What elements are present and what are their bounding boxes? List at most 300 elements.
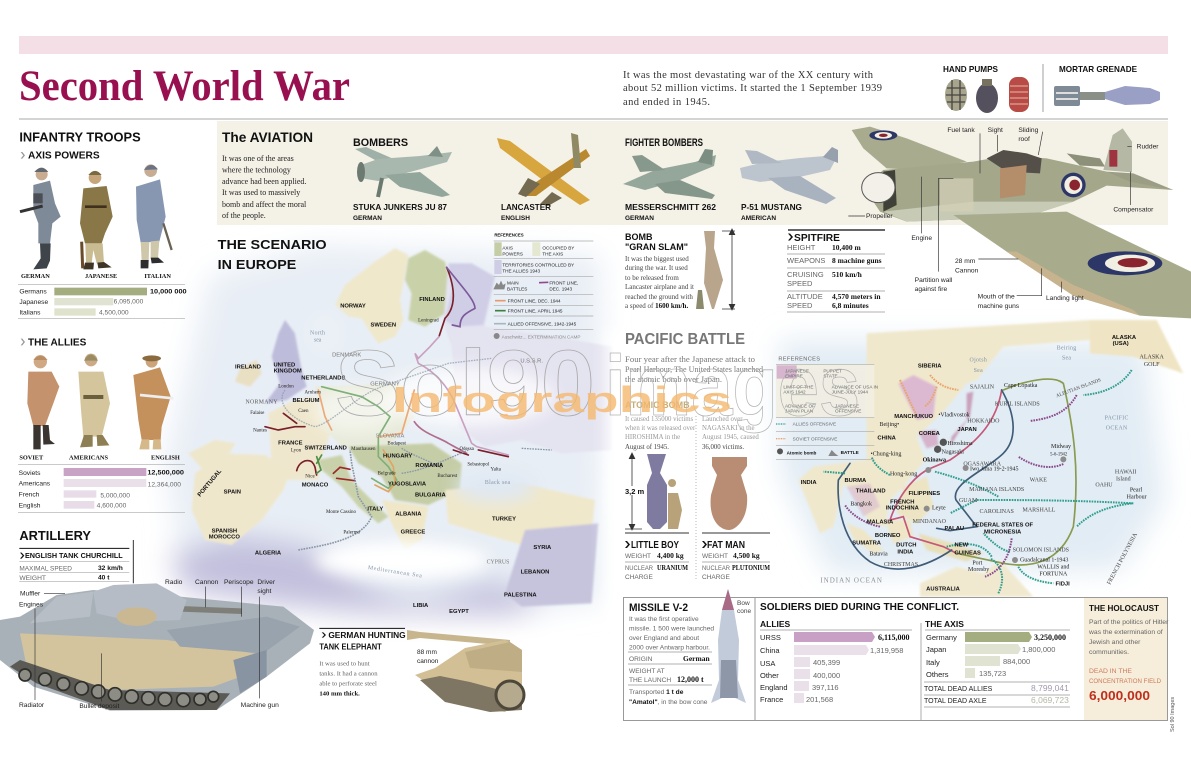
map labels: Nice [305, 474, 315, 479]
panel: bomb grand slam: BOMB [625, 232, 653, 242]
table: fat man: NUCLEAR [702, 565, 730, 572]
map labels: ALASKA [1112, 335, 1137, 341]
roundels [869, 130, 1162, 275]
panel: pacific battle [624, 331, 770, 581]
heading: german hunting tank [319, 628, 406, 651]
map labels: Hiroshima [947, 441, 973, 447]
heading: german hunting tank: TANK ELEPHANT [319, 642, 382, 651]
map labels: JAPAN [957, 427, 977, 433]
panel: spitfire data: 4,570 meters in [832, 292, 881, 301]
text block: nagasaki: NAGASAKI in the [702, 425, 754, 432]
bar chart: allies dead: China [760, 646, 780, 655]
map labels: BULGARIA [415, 493, 446, 499]
pale reference backing [776, 364, 874, 418]
map labels: Palermo [343, 530, 360, 535]
illustration: p-51 mustang [740, 147, 838, 204]
bar chart: axis dead: Germany [926, 633, 957, 642]
illustration: messerschmitt [623, 149, 716, 199]
map labels: Black sea [485, 480, 510, 486]
map labels: Batavia [869, 552, 888, 558]
table: little boy [625, 533, 689, 581]
watermark: Sol90 [335, 331, 595, 435]
map labels: SAJALIN [970, 384, 995, 390]
panel: holocaust: 6,000,000 [1089, 688, 1150, 703]
map labels: Iwo Jima 19-2-1945 [970, 467, 1019, 473]
panel: bottom statistics [624, 589, 1176, 732]
labels: allied soldiers: AMERICANS [69, 455, 109, 462]
panel: spitfire data: SPITFIRE [794, 232, 840, 244]
panel: aviation: ENGLISH [501, 215, 530, 222]
bar chart: allies dead: Other [760, 671, 779, 680]
map labels: SWITZERLAND [304, 446, 347, 452]
callouts: Mouth of the [978, 294, 1015, 301]
panel: missile v-2: 2000 over Antwarp harbour. [629, 644, 710, 652]
panel: bomb grand slam: during the war. It used [625, 264, 688, 272]
map labels: HUNGARY [383, 454, 412, 460]
heading: fighter bombers: FIGHTER BOMBERS [625, 137, 703, 149]
labels: axis soldiers: ITALIAN [144, 273, 171, 280]
watermark: Infographics [392, 379, 732, 420]
heading: atomic bomb: ATOMIC BOMB [625, 400, 690, 410]
table: fat man: 4,500 kg [733, 551, 760, 560]
bar chart: axis dead: Others [926, 670, 949, 679]
heading: infantry troops: INFANTRY TROOPS [19, 130, 141, 145]
legend: europe references: BATTLES [507, 287, 527, 292]
bar chart: allies dead [760, 619, 912, 704]
table: churchill: MAXIMAL SPEED [19, 565, 72, 572]
labels: allied soldiers [19, 455, 180, 462]
map labels: MONACO [302, 483, 329, 489]
bar chart: allies dead: ALLIES [760, 619, 791, 629]
callouts: Fuel tank [947, 127, 975, 134]
map labels: CHRISTMAS [884, 562, 918, 568]
soldier: american [78, 354, 110, 447]
map labels: YUGOSLAVIA [388, 481, 427, 487]
text block: nagasaki: Launched over [702, 416, 743, 423]
panel: bottom statistics: cone [737, 608, 751, 615]
labels: allied soldiers: ENGLISH [151, 455, 180, 462]
callouts: Landing light [1046, 295, 1084, 302]
table: fat man: PLUTONIUM [732, 564, 770, 572]
map labels: Moresby [968, 567, 989, 573]
legend: europe references: Auschwitz... EXTERMINATION CAMP [502, 334, 580, 339]
panel: holocaust: Jewish and other [1089, 639, 1141, 646]
map labels: Beiring [1057, 345, 1077, 351]
legend: pacific references: PUPPET [823, 369, 842, 374]
map labels: SIBERIA [918, 364, 942, 370]
allied and soviet offensive arrows [823, 370, 1133, 593]
map labels: MANCHUKUO [894, 414, 934, 420]
text block: aviation: where the technology [222, 166, 291, 174]
map labels: SUMATRA [852, 541, 882, 547]
map labels: Island [1116, 477, 1131, 483]
map labels: Belgrade [378, 472, 396, 477]
map labels: DENMARK [332, 353, 361, 359]
table: little boy: 4,400 kg [657, 551, 684, 560]
soldier: soviet [27, 355, 59, 449]
panel: holocaust: CONCENTRATION FIELD [1089, 678, 1161, 685]
panel: bomb grand slam: reached the ground with [625, 293, 693, 301]
text block: nagasaki: 36,000 victims. [702, 444, 744, 451]
map: pacific [776, 320, 1183, 597]
map labels: BELGIUM [293, 398, 320, 404]
map labels: MICRONESIA [984, 530, 1022, 536]
panel: missile v-2: ORIGIN [629, 656, 653, 663]
map labels: OCEAN [1106, 426, 1128, 432]
text block: elephant: able to perforate steel [319, 681, 377, 688]
watermark [335, 331, 860, 435]
bar chart: axis dead: THE AXIS [925, 619, 964, 629]
map labels: ALASKA [1140, 355, 1164, 361]
text block: aviation: bomb and affect the moral [222, 200, 307, 209]
legend: pacific references: OFFENSIVE [835, 408, 861, 413]
heading: the scenario: THE SCENARIO [218, 238, 327, 252]
map labels: INDIAN OCEAN [820, 576, 883, 584]
panel: missile v-2: missile. 1 500 were launched [629, 626, 714, 632]
map labels: NEW [955, 543, 969, 549]
illustration: lancaster [497, 133, 590, 206]
callouts: Rudder [1137, 144, 1159, 151]
map labels: (USA) [1113, 341, 1129, 347]
map labels: Ojotsh [970, 357, 987, 363]
callouts: 28 mm [955, 258, 976, 265]
callouts: Propeller [866, 213, 893, 220]
map labels: Odessa [459, 447, 475, 452]
map labels: Arnhem [304, 391, 321, 396]
tank callouts: Radio [165, 579, 183, 586]
text block: elephant: tanks. It had a cannon [319, 671, 378, 678]
panel: artillery [0, 529, 406, 711]
text block: hiroshima [625, 416, 696, 451]
panel: spitfire data: HEIGHT [787, 243, 816, 252]
map labels: IRELAND [235, 365, 261, 371]
map labels: NORMANY [245, 400, 278, 406]
bar chart: axis dead: 3,250,000 [1034, 633, 1066, 642]
tank callouts: Periscope [224, 579, 254, 586]
map labels: FIDJI [1056, 581, 1070, 587]
legend: europe references: REFERENCES [494, 232, 524, 237]
map labels: LIBIA [413, 603, 429, 609]
map labels: Mediterranean Sea [367, 565, 423, 580]
map labels: GERMANY [370, 381, 400, 387]
label: 88 mm cannon: 88 mm [417, 649, 437, 656]
arrow: 3.2 m: 3,2 m [625, 487, 645, 496]
map labels: Nagasaki [942, 449, 964, 455]
text block: pacific intro: Pearl Harbour, The United States launched [625, 365, 763, 374]
map labels: ALGERIA [255, 550, 282, 556]
legend: pacific references [776, 357, 878, 459]
heading: soldiers died: SOLDIERS DIED DURING THE CONFLICT. [760, 601, 959, 613]
tank callouts: Bullet deposit [79, 703, 119, 710]
bar chart: axis dead [924, 619, 1070, 707]
table: fat man: CHARGE [702, 574, 730, 581]
map labels: OAHU [1095, 483, 1113, 489]
battle icons [924, 439, 1066, 563]
table: churchill: ENGLISH TANK CHURCHILL [25, 551, 123, 560]
intro text [623, 70, 882, 108]
tank callouts [19, 579, 279, 710]
text block: elephant [319, 661, 378, 698]
land [798, 320, 1183, 597]
map labels: Falaise [250, 411, 265, 416]
bar chart: axis troops: Japanese [19, 299, 48, 306]
panel: holocaust: DEAD IN THE [1089, 668, 1132, 675]
map labels: INDIA [897, 550, 914, 556]
legend: pacific references: JAPAN PLAN [785, 408, 813, 413]
table: churchill [19, 551, 129, 582]
legend: pacific references: BATTLE [841, 450, 859, 455]
credit: Sol 90 Images [1170, 697, 1176, 732]
bar chart: axis dead: Japan [926, 645, 946, 654]
map labels: CYPRUS [487, 559, 509, 565]
bar chart: allies dead: 6,115,000 [878, 633, 910, 642]
tank callouts: sight [257, 588, 272, 595]
labels: allied soldiers: SOVIET [19, 455, 44, 462]
panel: missile v-2: THE LAUNCH [629, 677, 671, 684]
map labels [801, 335, 1164, 592]
map labels: Guadalcanal 1-1943 [1020, 558, 1068, 564]
bar chart: allied troops: 4,600,000 [97, 503, 127, 510]
bar chart: allied troops: French [19, 492, 40, 499]
text block: pacific intro: Four year after the Japanese attack to [625, 355, 755, 364]
callouts: Cannon [955, 267, 979, 274]
map labels: Caen [298, 409, 309, 414]
map labels: FORTUNA [1039, 572, 1068, 578]
text block: hiroshima: August of 1945. [625, 444, 669, 451]
legend: europe references: POWERS [502, 251, 523, 256]
bar chart: axis troops: 6,095,000 [114, 298, 144, 305]
table: fat man: WEIGHT [702, 553, 728, 560]
top colour band [19, 36, 1168, 54]
text block: hiroshima: It caused 135000 victims [625, 416, 693, 423]
panel: hand pumps: HAND PUMPS [943, 64, 998, 74]
tank callouts: Cannon [195, 579, 219, 586]
panel: aviation: GERMAN [353, 215, 382, 222]
map labels: DUTCH [896, 543, 917, 549]
map labels: U.S.S.R. [520, 358, 543, 364]
table: little boy: URANIUM [657, 564, 688, 572]
soldier: japanese [80, 171, 113, 269]
map labels: COREA [919, 431, 941, 437]
legend: pacific references: SOVIET OFFENSIVE [793, 436, 837, 441]
panel: spitfire data: SPEED [787, 279, 813, 288]
map labels: SPANISH [212, 528, 237, 534]
front lines [265, 267, 508, 492]
map labels: GUAM [959, 498, 978, 504]
map labels: MARIANA ISLANDS [969, 487, 1024, 493]
icon: small man [696, 290, 704, 309]
panel: spitfire data: 510 km/h [832, 270, 863, 279]
map labels: INDOCHINA [886, 506, 920, 512]
label: portugal: PORTUGAL [197, 468, 223, 498]
panel: holocaust [1088, 603, 1169, 703]
legend: pacific references: JAPANESE [785, 369, 809, 374]
panel: bomb grand slam: It was the biggest used [625, 255, 689, 263]
map labels: LEBANON [521, 570, 549, 576]
tank: elephant [407, 630, 524, 712]
panel: spitfire data: 10,400 m [832, 243, 862, 252]
map labels: ALEUTIAN ISLANDS [1056, 378, 1102, 399]
map labels [209, 297, 552, 615]
icon: little boy [647, 454, 667, 529]
map labels: CAROLINAS [980, 509, 1014, 515]
text: cannon [417, 658, 439, 665]
map background [165, 245, 605, 615]
panel: pacific battle: PACIFIC BATTLE [625, 331, 745, 348]
map labels: Sea [1062, 356, 1071, 362]
bar chart: allied troops: 12,364,000 [148, 482, 181, 489]
map: scenario in europe [165, 232, 647, 678]
panel: holocaust: was the extermination of [1088, 629, 1163, 636]
icon: grenade 2 [976, 79, 998, 113]
arrow: height [722, 229, 735, 310]
map labels: GUINEAS [954, 550, 981, 556]
soldier: italian [136, 164, 172, 268]
bar chart: axis dead: 6,069,723 [1031, 695, 1069, 705]
bar chart: allies dead: England [760, 683, 788, 692]
legend: europe references: FRONT LINE, [549, 281, 578, 286]
bar chart: allies dead: URSS [760, 633, 781, 642]
legend: europe references: FRONT LINE, DEC. 1944 [508, 298, 561, 303]
arrow: 3.2 m [624, 453, 645, 530]
map labels: Leningrad [418, 319, 439, 324]
bar chart: allied troops: English [19, 503, 41, 510]
map labels: GREECE [401, 529, 425, 535]
map labels: Lyon [291, 449, 302, 454]
map labels: MARSHALL [1023, 507, 1056, 513]
map labels: Monte Cassino [326, 510, 357, 515]
map labels: TURKEY [492, 516, 516, 522]
legend: pacific references: LIMIT OF THE [783, 384, 813, 389]
map labels: MALASIA [867, 520, 894, 526]
legend: europe references: FRONT LINE, APRIL 1945 [508, 309, 563, 314]
map labels: SYRIA [533, 545, 552, 551]
tank callouts: Muffler [20, 591, 41, 598]
map labels: MINDANAO [913, 519, 947, 525]
table: little boy: NUCLEAR [625, 565, 653, 572]
icon: grand slam bomb [704, 231, 723, 309]
bar chart: allied troops: Soviets [19, 470, 41, 477]
intro text: It was the most devastating war of the XX century with [623, 70, 874, 81]
callouts: roof [1018, 136, 1030, 143]
map labels: GOLF [1144, 362, 1160, 368]
legend: pacific references: EMPIRE [785, 374, 803, 379]
legend: pacific references: JAPANESE [835, 403, 859, 408]
legend: europe references: TERRITORIES CONTROLLED BY [502, 263, 574, 268]
panel: spitfire data: CRUISING [787, 270, 824, 279]
legend: pacific references: REFERENCES [778, 357, 820, 363]
bar chart: allies dead: 201,568 [806, 695, 833, 704]
map labels: ALBANIA [395, 511, 422, 517]
map labels: HOKKAIDO [967, 418, 1000, 424]
panel: bomb grand slam: Lancaster airplane and it [625, 283, 694, 291]
subheading: axis powers: AXIS POWERS [28, 151, 100, 162]
map labels: NETHERLANDS [301, 375, 345, 381]
bar chart: axis dead: TOTAL DEAD AXLE [924, 698, 987, 705]
map labels: London [278, 384, 294, 389]
panel: infantry troops [18, 130, 187, 513]
watermark: images [605, 339, 860, 434]
bar chart: allied troops: Americans [19, 481, 51, 488]
map labels: ITALY [367, 507, 383, 513]
callouts: Compensator [1113, 206, 1154, 213]
text block: nagasaki: August 1945, caused [702, 434, 759, 441]
bar chart: allied troops: 5,000,000 [100, 492, 130, 499]
offensive arrows [282, 358, 552, 550]
panel: spitfire data: WEAPONS [787, 256, 825, 265]
map labels: Bangkok [850, 502, 872, 508]
bar chart: axis troops: 10,000 000 [150, 288, 187, 295]
white wash and seas [215, 310, 647, 678]
map labels: •Vladivostok [938, 413, 970, 419]
illustration: spitfire [848, 127, 1191, 318]
panel: missile v-2: It was the first operative [629, 616, 699, 623]
heading: the aviation: The AVIATION [222, 130, 313, 145]
bar chart: axis dead: 135,723 [979, 669, 1006, 678]
map labels: BORNEO [875, 533, 901, 539]
map labels: EGYPT [449, 609, 469, 615]
bar chart: axis troops: Germans [19, 288, 47, 295]
panel: bomb grand slam [625, 229, 735, 310]
callouts [848, 127, 1159, 310]
label: bow cone: Bow [737, 600, 750, 607]
bar chart: allies dead: 1,319,958 [870, 646, 903, 655]
map labels: FEDERAL STATES OF [972, 522, 1034, 528]
subheading: the allies: THE ALLIES [28, 338, 86, 349]
bar chart: axis troops: Italians [19, 309, 41, 316]
panel: hand pumps [943, 64, 1029, 113]
panel: spitfire data: 8 machine guns [832, 256, 882, 265]
map labels: SWEDEN [371, 323, 396, 329]
bar chart: axis dead: 1,800,000 [1022, 645, 1055, 654]
legend: europe references: MAIN [507, 281, 519, 286]
map labels: AUSTRALIA [926, 586, 961, 592]
text block: pacific intro: the atomic bomb over Japan. [625, 375, 722, 384]
panel: aviation: GERMAN [625, 215, 654, 222]
title: Second World War [19, 63, 350, 110]
map labels: MOROCCO [209, 534, 240, 540]
table: churchill: 40 t [98, 574, 110, 581]
map labels: PALAU [945, 526, 964, 532]
text block: aviation: of the people. [222, 211, 266, 220]
map labels: ROMANIA [415, 463, 444, 469]
panel: spitfire data [787, 230, 885, 312]
legend: europe references: OCCUPIED BY [542, 245, 574, 250]
panel: bomb grand slam: to be released from [625, 274, 679, 282]
text block: aviation: It was one of the areas [222, 154, 294, 163]
table: little boy: CHARGE [625, 574, 653, 581]
legend: europe references [493, 232, 593, 339]
label: lancaster: LANCASTER [501, 202, 551, 212]
bar chart: axis dead: TOTAL DEAD ALLIES [924, 686, 993, 693]
map labels: FILIPPINES [908, 491, 940, 497]
map labels: HAWAII [1115, 469, 1136, 475]
legend: pacific references: AXIS 1942 [783, 389, 806, 394]
bar chart: allies dead: France [760, 695, 783, 704]
legend: pacific references: ALLIES OFFENSIVE [793, 422, 836, 427]
map labels: sea [314, 337, 322, 343]
sea background [780, 340, 1165, 575]
bar chart: allies dead: 400,000 [813, 671, 840, 680]
table: fat man: FAT MAN [707, 540, 745, 551]
tank: churchill [0, 540, 314, 711]
labels: axis soldiers [21, 273, 171, 280]
table: little boy: LITTLE BOY [631, 540, 679, 551]
bar chart: allies dead: USA [760, 659, 775, 668]
map labels: Leyte [932, 505, 946, 511]
panel: missile v-2: 12,000 t [677, 675, 704, 684]
bar chart: axis dead: 8,799,041 [1031, 683, 1069, 693]
